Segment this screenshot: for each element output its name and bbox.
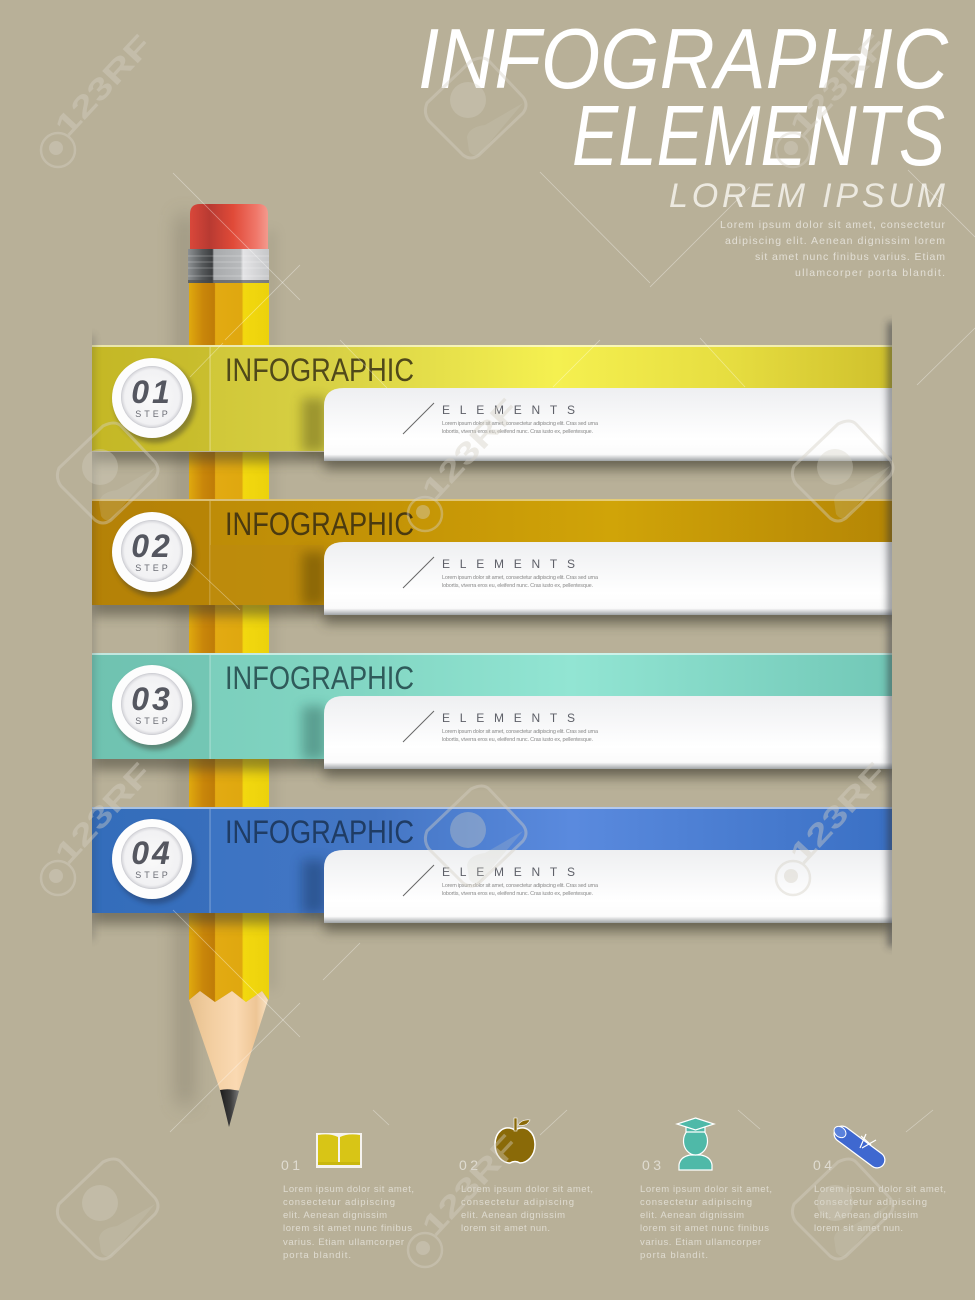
card text 3: lobortis, viverra eros eu, eleifend nunc. Cras iusto ex, pellentesque.: [442, 737, 593, 743]
band drop shadows: [92, 452, 892, 938]
step badge 4: [112, 819, 196, 904]
card text 3: ELEMENTS: [442, 711, 575, 725]
footer column 2: 02: [459, 1157, 478, 1173]
step badge 1: 01: [131, 374, 173, 410]
card text 4: ELEMENTS: [442, 865, 575, 879]
step badge 4: 04: [131, 835, 173, 871]
watermark wordmarks: 123RF: [784, 757, 893, 871]
pencil: [178, 204, 275, 1127]
footer column 1: [281, 1157, 414, 1261]
watermark wordmarks: 123RF: [416, 393, 525, 507]
footer column 3: Lorem ipsum dolor sit amet,: [640, 1184, 772, 1195]
footer column 1: consectetur adipiscing: [283, 1197, 395, 1208]
footer column 4: 04: [813, 1157, 832, 1173]
step badge 4: STEP: [135, 870, 171, 880]
watermark diagonal lines: [170, 170, 975, 1135]
card text 4: [403, 865, 599, 897]
band 1: [92, 345, 892, 451]
step badge 1: [112, 358, 196, 443]
footer column 1: 01: [281, 1157, 300, 1173]
pencil tip wood: [189, 991, 268, 1090]
card text 1: lobortis, viverra eros eu, eleifend nunc. Cras iusto ex, pellentesque.: [442, 429, 593, 435]
card text 1: [403, 403, 599, 435]
footer column 1: lorem sit amet nunc finibus: [283, 1223, 412, 1234]
footer column 4: elit. Aenean dignissim: [814, 1210, 918, 1221]
pencil lead: [220, 1089, 239, 1127]
intro paragraph: adipiscing elit. Aenean dignissim lorem: [725, 235, 945, 247]
footer column 2: elit. Aenean dignissim: [461, 1210, 565, 1221]
footer column 3: [640, 1157, 772, 1261]
card text 2: Lorem ipsum dolor sit amet, consectetur adipiscing elit. Cras sed urna: [442, 575, 599, 581]
card text 2: ELEMENTS: [442, 557, 575, 571]
band 2: [92, 499, 892, 605]
card text 2: [403, 557, 599, 589]
card text 2: lobortis, viverra eros eu, eleifend nunc. Cras iusto ex, pellentesque.: [442, 583, 593, 589]
footer column 2: consectetur adipiscing: [461, 1197, 574, 1208]
icon: apple: [495, 1118, 535, 1163]
card text 4: Lorem ipsum dolor sit amet, consectetur adipiscing elit. Cras sed urna: [442, 883, 599, 889]
step badge 3: 03: [131, 681, 173, 717]
icon: graduate: [677, 1118, 714, 1170]
footer column 2: Lorem ipsum dolor sit amet,: [461, 1184, 593, 1195]
slit shadows at band edges: [88, 322, 896, 947]
step badge 1: STEP: [135, 409, 171, 419]
footer column 4: Lorem ipsum dolor sit amet,: [814, 1184, 946, 1195]
watermark wordmarks: 123RF: [784, 29, 893, 143]
intro paragraph: Lorem ipsum dolor sit amet, consectetur: [720, 219, 946, 231]
pencil body: [189, 283, 269, 1002]
subtitle: LOREM IPSUM: [669, 177, 946, 215]
watermark wordmarks: 123RF: [416, 1129, 525, 1243]
step badge 2: STEP: [135, 563, 171, 573]
intro paragraph: [720, 219, 946, 279]
panel: step 1: [92, 345, 892, 461]
watermark wordmarks: 123RF: [49, 757, 158, 871]
card text 1: ELEMENTS: [442, 403, 575, 417]
watermark wordmarks: 123RF: [49, 29, 158, 143]
footer column 1: varius. Etiam ullamcorper: [283, 1237, 404, 1248]
band 4: [92, 807, 892, 913]
ferrule: [188, 249, 269, 283]
footer column 4: [813, 1157, 946, 1234]
footer column 3: varius. Etiam ullamcorper: [640, 1237, 761, 1248]
band heading 4: INFOGRAPHIC: [225, 814, 414, 850]
panel: step 2: [92, 499, 892, 615]
intro paragraph: sit amet nunc finibus varius. Etiam: [755, 251, 945, 263]
eraser: [190, 204, 268, 249]
band heading 3: INFOGRAPHIC: [225, 660, 414, 696]
band heading 1: INFOGRAPHIC: [225, 352, 414, 388]
step badge 2: [112, 512, 196, 597]
footer column 3: 03: [642, 1157, 661, 1173]
footer column 3: consectetur adipiscing: [640, 1197, 752, 1208]
footer column 1: elit. Aenean dignissim: [283, 1210, 387, 1221]
intro paragraph: ullamcorper porta blandit.: [795, 267, 945, 279]
footer column 3: porta blandit.: [640, 1250, 708, 1261]
card text 3: [403, 711, 599, 743]
footer column 1: porta blandit.: [283, 1250, 351, 1261]
white card 3: [324, 696, 892, 769]
panel: step 4: [92, 807, 892, 923]
footer column 2: [459, 1157, 593, 1234]
watermark eggs: [57, 58, 893, 1259]
card text 4: lobortis, viverra eros eu, eleifend nunc. Cras iusto ex, pellentesque.: [442, 891, 593, 897]
step badge 3: STEP: [135, 716, 171, 726]
icon: book: [316, 1133, 362, 1168]
white card 2: [324, 542, 892, 615]
step badge 3: [112, 665, 196, 750]
footer column 4: consectetur adipiscing: [814, 1197, 927, 1208]
card text 1: Lorem ipsum dolor sit amet, consectetur adipiscing elit. Cras sed urna: [442, 421, 599, 427]
icon: diploma scroll: [832, 1124, 877, 1160]
white card 4: [324, 850, 892, 923]
footer column 3: lorem sit amet nunc finibus: [640, 1223, 769, 1234]
footer column 3: elit. Aenean dignissim: [640, 1210, 744, 1221]
step badge 2: 02: [131, 528, 173, 564]
title: [418, 12, 949, 184]
band heading 2: INFOGRAPHIC: [225, 506, 414, 542]
card text 3: Lorem ipsum dolor sit amet, consectetur adipiscing elit. Cras sed urna: [442, 729, 599, 735]
band 3: [92, 653, 892, 759]
footer column 4: lorem sit amet nun.: [814, 1223, 903, 1234]
white card 1: [324, 388, 892, 461]
footer column 1: Lorem ipsum dolor sit amet,: [283, 1184, 414, 1195]
footer column 2: lorem sit amet nun.: [461, 1223, 550, 1234]
panel: step 3: [92, 653, 892, 769]
